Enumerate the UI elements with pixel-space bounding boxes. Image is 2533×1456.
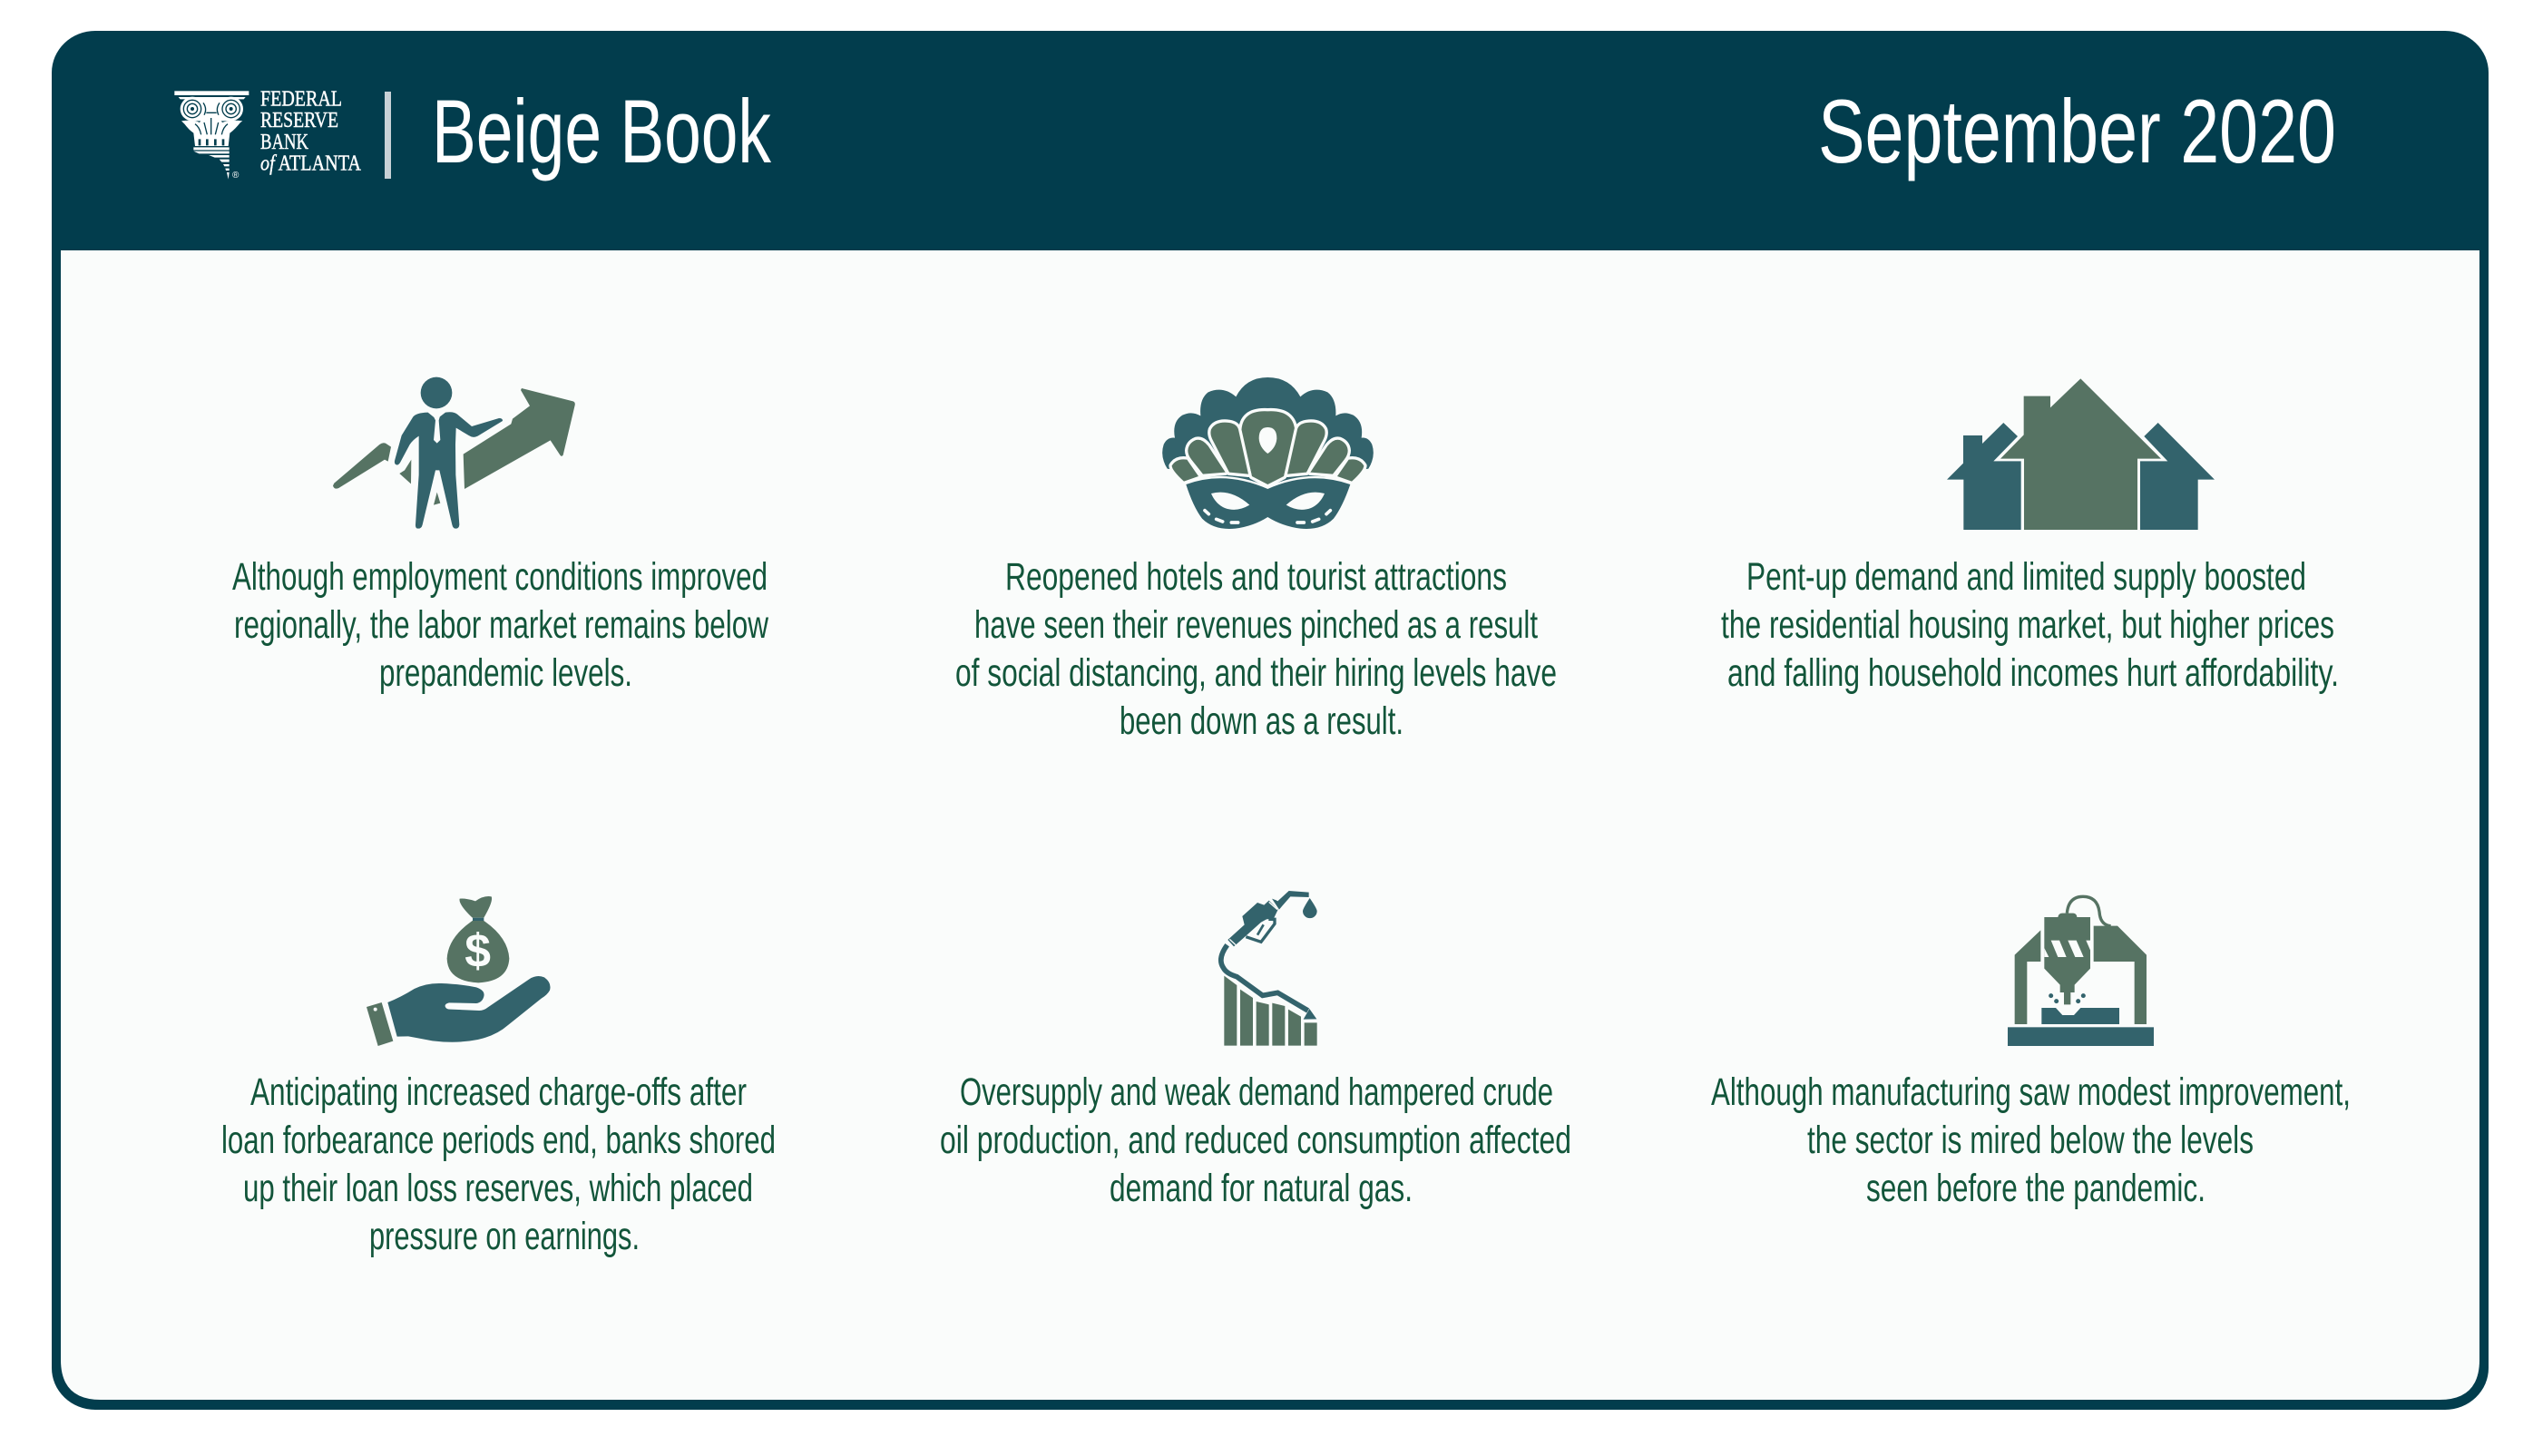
- icon: hand holding money bag: $: [465, 924, 491, 977]
- logo wordmark: [260, 87, 361, 176]
- text: tourism: of social distancing, and their hiring levels have: [955, 652, 1557, 695]
- icon: industrial press machine: [2008, 896, 2154, 1046]
- title: Beige Book: [432, 81, 771, 181]
- logo capital emblem: ®: [232, 171, 240, 181]
- text: tourism: Reopened hotels and tourist attractions: [1005, 556, 1507, 599]
- logo wordmark: of ATLANTA: [260, 151, 361, 176]
- icon: houses: [1947, 378, 2215, 530]
- text: housing: the residential housing market, but higher prices: [1721, 604, 2334, 647]
- icon: carnival mask: [1162, 377, 1374, 529]
- text: employment: regionally, the labor market remains below: [234, 604, 768, 647]
- logo divider: [385, 92, 391, 179]
- text: energy: Oversupply and weak demand hampered crude: [960, 1071, 1553, 1114]
- text: employment: prepandemic levels.: [379, 652, 632, 695]
- text: energy: [940, 1071, 1571, 1210]
- text: manufacturing: seen before the pandemic.: [1866, 1168, 2205, 1210]
- text: tourism: [955, 556, 1557, 743]
- panel: energy: [940, 891, 1571, 1210]
- text: tourism: been down as a result.: [1120, 700, 1403, 743]
- text: energy: demand for natural gas.: [1110, 1168, 1413, 1210]
- text: employment: Although employment conditions improved: [232, 556, 768, 599]
- logo capital emblem: [174, 91, 249, 181]
- text: manufacturing: the sector is mired below the levels: [1807, 1119, 2254, 1162]
- logo: Federal Reserve Bank of Atlanta: [174, 87, 361, 181]
- text: banking: pressure on earnings.: [369, 1216, 640, 1258]
- date: September 2020: [1818, 81, 2336, 181]
- icon: businessman and rising arrow: [333, 377, 575, 529]
- logo wordmark: FEDERAL: [260, 87, 342, 111]
- card body panel: [61, 250, 2479, 1400]
- header band: [174, 81, 2336, 181]
- panel: manufacturing: [1711, 896, 2351, 1210]
- text: housing: Pent-up demand and limited supply boosted: [1746, 556, 2306, 599]
- text: banking: Anticipating increased charge-offs after: [250, 1071, 747, 1114]
- text: energy: oil production, and reduced consumption affected: [940, 1119, 1571, 1162]
- logo wordmark: BANK: [260, 130, 308, 154]
- text: banking: [221, 1071, 776, 1258]
- text: banking: loan forbearance periods end, banks shored: [221, 1119, 776, 1162]
- text: manufacturing: [1711, 1071, 2351, 1210]
- text: employment: [232, 556, 768, 695]
- text: housing: [1721, 556, 2339, 695]
- panel: banking: [221, 896, 776, 1258]
- text: tourism: have seen their revenues pinched as a result: [974, 604, 1538, 647]
- panel: tourism: [955, 377, 1557, 743]
- panel: employment: [232, 377, 768, 695]
- icon: hand holding money bag: [367, 896, 551, 1046]
- logo wordmark: RESERVE: [260, 108, 338, 132]
- panel: housing: [1721, 378, 2339, 695]
- text: banking: up their loan loss reserves, which placed: [243, 1168, 753, 1210]
- icon: fuel nozzle and falling bars: [1221, 891, 1317, 1046]
- text: housing: and falling household incomes hurt affordability.: [1727, 652, 2339, 695]
